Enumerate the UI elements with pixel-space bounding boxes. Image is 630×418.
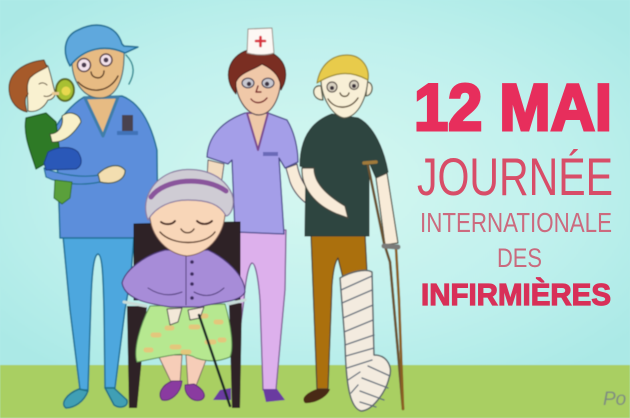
child trousers xyxy=(44,148,81,170)
man shirt xyxy=(300,114,388,236)
heading: INFIRMIÈRES: INFIRMIÈRES xyxy=(421,277,611,312)
nurse tunic xyxy=(207,113,298,234)
tunic collar xyxy=(247,113,268,150)
floral skirt xyxy=(136,304,232,362)
chair right leg xyxy=(229,303,242,408)
man right arm xyxy=(376,173,398,245)
surgeon eyes xyxy=(78,54,112,72)
chair left leg xyxy=(127,306,147,408)
crutch xyxy=(364,162,403,409)
closed eyes xyxy=(161,221,212,224)
man shoe xyxy=(303,389,330,403)
leg cast xyxy=(340,270,390,411)
shoes xyxy=(160,381,204,401)
nurse face lines xyxy=(251,86,267,103)
surgical cap xyxy=(65,25,138,66)
name badge xyxy=(263,152,278,156)
signature: Po xyxy=(603,389,626,410)
man hair xyxy=(317,55,368,83)
figure: man on crutch xyxy=(300,55,403,411)
nurse shoes xyxy=(213,388,285,402)
nurse cap xyxy=(247,28,274,55)
ground xyxy=(0,365,630,418)
nurse hair xyxy=(228,49,286,94)
child head xyxy=(27,65,55,111)
nurse head xyxy=(235,63,281,115)
child boot xyxy=(54,180,72,204)
cap ties xyxy=(126,55,133,84)
surgeon scrub top xyxy=(53,96,158,238)
scrub collar xyxy=(85,97,118,136)
man head xyxy=(321,65,368,118)
man eyes xyxy=(327,80,358,92)
heading: 12 MAI: 12 MAI xyxy=(414,70,612,144)
figure: child with rattle xyxy=(9,60,81,204)
nurse trousers xyxy=(236,230,286,390)
nurse eyes xyxy=(242,78,274,88)
nurse left arm xyxy=(207,160,224,186)
cardigan details xyxy=(148,256,224,305)
surgeon hand xyxy=(98,166,125,183)
chair seat rail xyxy=(124,300,245,306)
grey hair xyxy=(146,169,233,220)
cardigan xyxy=(122,250,245,307)
heading: DES: DES xyxy=(497,243,542,273)
walking cane xyxy=(199,315,230,406)
man face lines xyxy=(328,93,358,107)
child hair xyxy=(9,60,47,112)
figure: nurse xyxy=(207,28,335,402)
surgeon legs xyxy=(63,236,134,390)
head xyxy=(150,194,225,256)
man left arm xyxy=(302,168,348,218)
figure: grandmother in chair xyxy=(122,169,245,408)
surgeon head xyxy=(72,42,124,98)
rattle xyxy=(52,79,74,101)
man trousers xyxy=(311,234,367,389)
legs xyxy=(158,355,208,386)
smile xyxy=(160,229,215,242)
surgeon arm xyxy=(44,168,100,184)
pocket with pens xyxy=(117,115,138,135)
surgeon shoes xyxy=(64,388,127,408)
surgeon face lines xyxy=(78,71,118,90)
purple headband xyxy=(151,181,226,197)
child face lines xyxy=(39,83,52,96)
buttons xyxy=(190,260,194,300)
nurse right arm xyxy=(286,164,335,214)
chair back xyxy=(134,222,240,300)
child hand and arm xyxy=(50,113,81,142)
figure: surgeon xyxy=(44,25,158,408)
man ears xyxy=(314,82,372,100)
hands xyxy=(167,307,204,325)
child shirt xyxy=(25,113,60,169)
